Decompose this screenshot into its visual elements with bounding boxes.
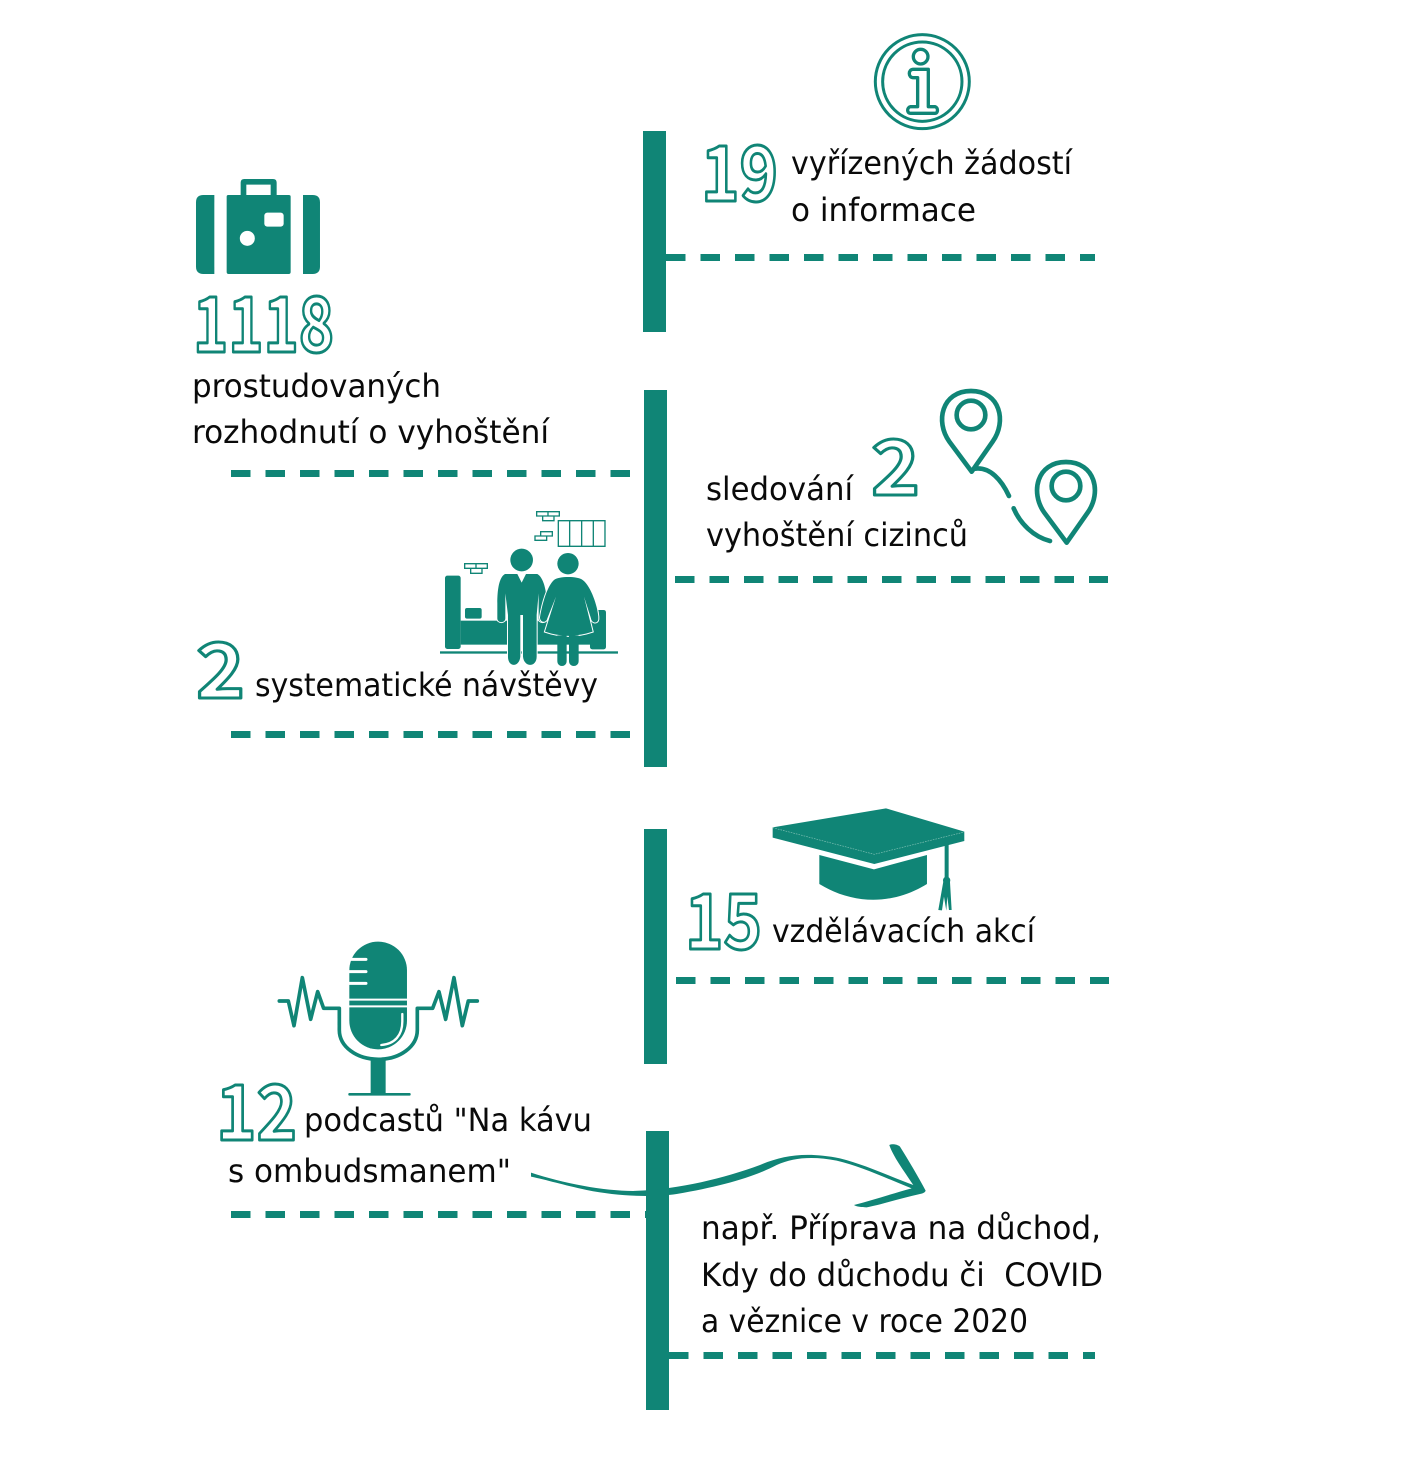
icon: visitors in a cell: [440, 512, 618, 666]
stat: 19 information requests: 19: [701, 113, 778, 223]
timeline bar 3: [644, 829, 667, 1064]
stat: 19 information requests: [701, 113, 1073, 229]
stat: 19 information requests: vyřízených žádostí: [791, 144, 1073, 182]
stat: 2 systematic visits: systematické návštěvy: [255, 666, 598, 704]
icon: suitcase: [196, 179, 320, 274]
stat: 12 podcasts: [216, 1052, 592, 1190]
stat: 2 expulsion monitorings: sledování: [706, 470, 854, 508]
stat: 15 educational events: [685, 861, 1036, 971]
timeline bar 2: [644, 390, 667, 767]
icon: information: [875, 35, 969, 129]
timeline bar 1: [643, 131, 666, 332]
stat: 2 expulsion monitorings: [706, 407, 968, 554]
arrow: from podcasts to examples: [531, 1144, 926, 1207]
stat: 2 systematic visits: [196, 610, 598, 720]
stat: 1118 expulsion decisions: prostudovaných: [192, 367, 441, 405]
icon: graduation cap: [773, 808, 964, 911]
stat: 1118 expulsion decisions: [192, 264, 550, 451]
stat: 12 podcasts: s ombudsmanem": [228, 1152, 511, 1190]
stat: 12 podcasts: podcastů "Na kávu: [304, 1101, 592, 1139]
stat: 2 systematic visits: 2: [196, 610, 245, 720]
stat: 15 educational events: 15: [685, 861, 762, 971]
text block: podcast examples: Kdy do důchodu či COVID: [701, 1256, 1103, 1294]
stat: 19 information requests: o informace: [791, 191, 976, 229]
stat: 1118 expulsion decisions: rozhodnutí o vyhoštění: [192, 413, 550, 451]
stat: 12 podcasts: 12: [216, 1052, 297, 1162]
text block: podcast examples: např. Příprava na důchod,: [701, 1209, 1101, 1247]
icon: map pins with route: [942, 391, 1095, 543]
stat: 1118 expulsion decisions: 1118: [193, 264, 334, 374]
stat: 15 educational events: vzdělávacích akcí: [772, 912, 1036, 950]
text block: podcast examples: [701, 1209, 1103, 1340]
text block: podcast examples: a věznice v roce 2020: [701, 1302, 1028, 1340]
stat: 2 expulsion monitorings: vyhoštění cizinců: [706, 516, 968, 554]
stat: 2 expulsion monitorings: 2: [871, 407, 920, 517]
timeline bar 4: [646, 1131, 669, 1410]
icon: podcast microphone: [279, 942, 477, 1096]
